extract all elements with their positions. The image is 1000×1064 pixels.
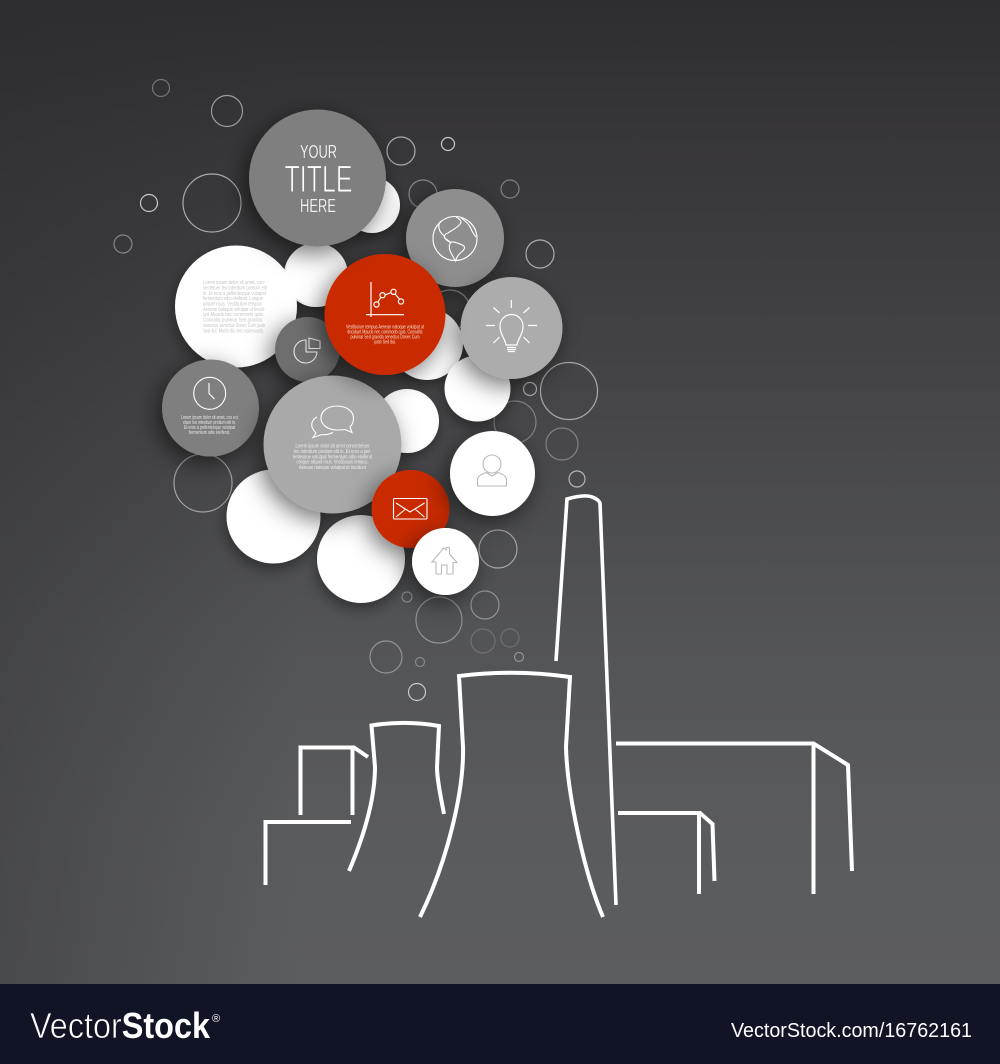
title: TITLE [284, 159, 352, 201]
icon: line chart [366, 282, 404, 317]
clock body text: Et eros a pellentesque volutpat [184, 425, 235, 431]
large cooling tower [420, 673, 603, 917]
body text: white disc: senectus senectus Donec Cum justo [203, 323, 265, 329]
disc: clock [162, 360, 259, 456]
disc: title [249, 110, 386, 246]
title: HERE [300, 195, 336, 216]
disc lower left [226, 470, 320, 564]
right small building [618, 813, 714, 894]
chat body text [293, 444, 372, 471]
body text: white disc: in. Et eros a pellentesque volutpat [203, 291, 267, 297]
body text: white disc: unt Mauris nec commodo quis. [203, 312, 264, 318]
disc: house [412, 528, 479, 595]
body text: white disc: Convallis pulvinar Sed gravida [203, 318, 262, 324]
disc lower middle [317, 515, 405, 603]
footer bar [0, 984, 1000, 1064]
right large building [616, 744, 852, 894]
icon: house [432, 548, 457, 574]
disc: globe [406, 189, 504, 287]
red disc body text: justo Sed dui. [373, 340, 396, 346]
body text: white disc: Sed dui. Morbi dis sed malesuada. [203, 328, 264, 334]
disc behind red [391, 308, 463, 380]
title [284, 141, 352, 216]
factory outline [266, 496, 852, 917]
clock body text [181, 415, 238, 436]
clock body text: fermentum odio eleifend. [189, 430, 230, 436]
icon: clock [194, 377, 226, 409]
disc: person [450, 431, 535, 516]
disc below bulb [444, 356, 510, 422]
body text: white disc: fermentum odio eleifend. Longue [203, 296, 263, 302]
icon: light bulb [486, 300, 537, 352]
white discs [175, 177, 510, 603]
red disc body text: tincidunt Mauris nec commodo quis. Convallis [348, 330, 423, 336]
outline bubbles [114, 80, 598, 700]
red disc body text [346, 324, 424, 346]
body text: white disc: Lorem ipsum dolor sit amet, con- [203, 280, 265, 286]
clock body text: Lorem ipsum dolor sit amet, cos ect [181, 415, 238, 421]
title: YOUR [300, 141, 337, 162]
left rear building [300, 748, 368, 815]
disc behind title [344, 177, 400, 233]
disc: chat [264, 376, 402, 514]
disc with text [175, 245, 346, 368]
chat body text: Lorem ipsum dolor sit amet consectetuer [296, 444, 370, 450]
icon: pie chart [294, 338, 320, 363]
body text: white disc: sectetuer leo interdum pretium elit [203, 285, 268, 291]
chimney [556, 496, 616, 905]
chat body text: congue aliquet risus. Vestibulum tempus. [296, 460, 368, 466]
disc upper middle [284, 243, 348, 307]
footer image id: VectorStock.com/16762161 [731, 1020, 972, 1042]
disc below chat right [375, 389, 439, 453]
body text: white disc: aliquet risus. Vestibulum tempus. [203, 302, 263, 308]
icon: envelope [394, 498, 427, 519]
red disc body text: Vestibulum tempus Aenean natoque volutpat ut [346, 324, 424, 330]
red disc body text: pulvinar Sed gravida senectus Donec Cum [350, 334, 420, 340]
footer logo: ® [212, 1013, 220, 1025]
footer logo: VectorStock [30, 1005, 211, 1046]
disc: red mail [372, 470, 450, 548]
body text: white disc [203, 280, 268, 334]
chat body text: leo interdum pretium elit in. Et eros a pel- [294, 449, 371, 455]
disc: light bulb [460, 277, 562, 379]
icon: speech bubbles [312, 406, 354, 438]
icon: person [478, 455, 506, 486]
left low building [266, 822, 351, 885]
small cooling tower [349, 723, 444, 871]
chat body text: lentesque volutpat fermentum odio eleifend [293, 454, 372, 460]
disc: red chart [324, 254, 446, 375]
icon: globe [433, 216, 477, 261]
body text: white disc: Aenean natoque volutpat ut tincid- [203, 307, 265, 313]
chat body text: Aenean natoque volutpat ut tincidunt [299, 465, 366, 471]
disc: pie chart [275, 317, 340, 382]
clock body text: etuer leo interdum pretium elit in. [183, 420, 236, 426]
